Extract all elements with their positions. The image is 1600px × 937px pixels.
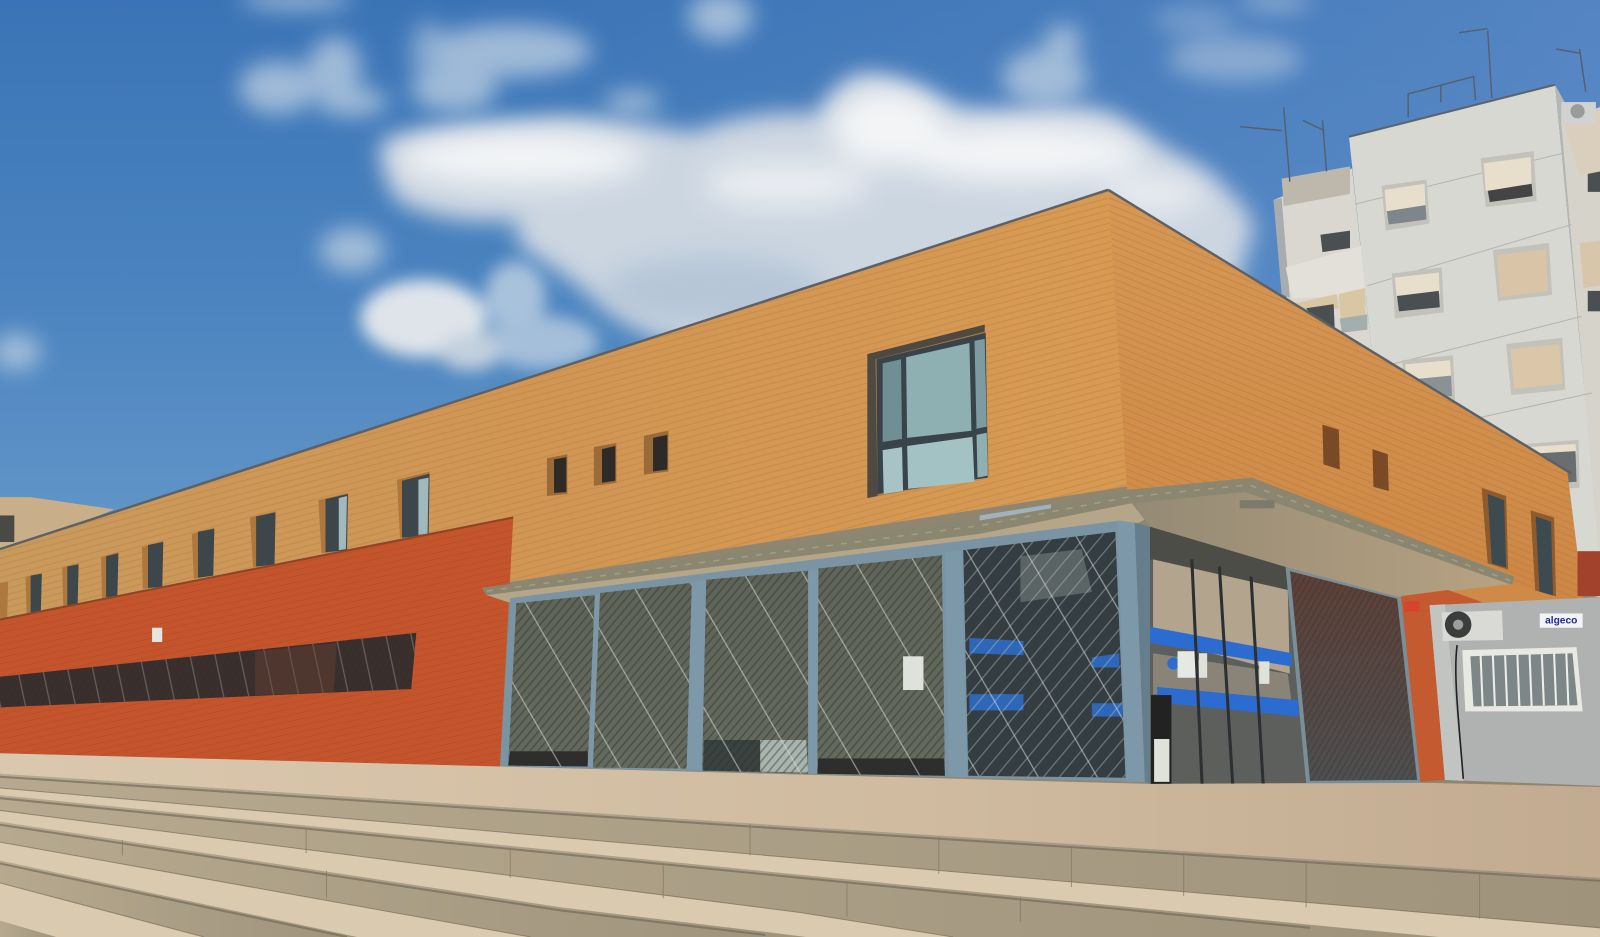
canopy	[482, 478, 1514, 597]
barred window	[1462, 647, 1583, 711]
clouds	[0, 0, 1311, 371]
logo: algeco	[1540, 613, 1583, 628]
upper row of small windows	[0, 431, 668, 620]
large upper window	[867, 325, 989, 498]
folded grille gate	[1288, 569, 1419, 783]
horizontal slatted window	[0, 633, 416, 707]
apartment block	[1240, 29, 1600, 633]
stone steps	[0, 774, 1600, 937]
air conditioning unit	[1442, 610, 1503, 641]
filler behind ground floor	[485, 480, 1600, 796]
left background building	[0, 497, 114, 551]
portable cabin	[1430, 597, 1600, 786]
plaza paving	[0, 753, 1600, 878]
step 3	[0, 822, 806, 937]
glazed ground floor with grilles	[500, 521, 1150, 782]
step 1	[0, 774, 1600, 928]
step 2	[0, 795, 1439, 937]
entrance doors with blue band	[1150, 527, 1419, 786]
logo: algeco: algeco	[1545, 616, 1577, 627]
orange brick side facade	[1108, 190, 1584, 602]
red brick lower wall	[0, 517, 513, 768]
orange brick upper volume: long front facade	[0, 190, 1131, 623]
soffit above glazing	[487, 503, 1153, 602]
orange wedge under canopy end	[1399, 584, 1584, 604]
step 4	[0, 860, 357, 937]
frame pillars	[588, 521, 1150, 784]
sign post	[1151, 695, 1171, 785]
step 5	[0, 921, 56, 937]
sky	[0, 0, 1600, 633]
wall plaque	[152, 628, 162, 642]
right red wall and alarm box	[1401, 551, 1600, 782]
